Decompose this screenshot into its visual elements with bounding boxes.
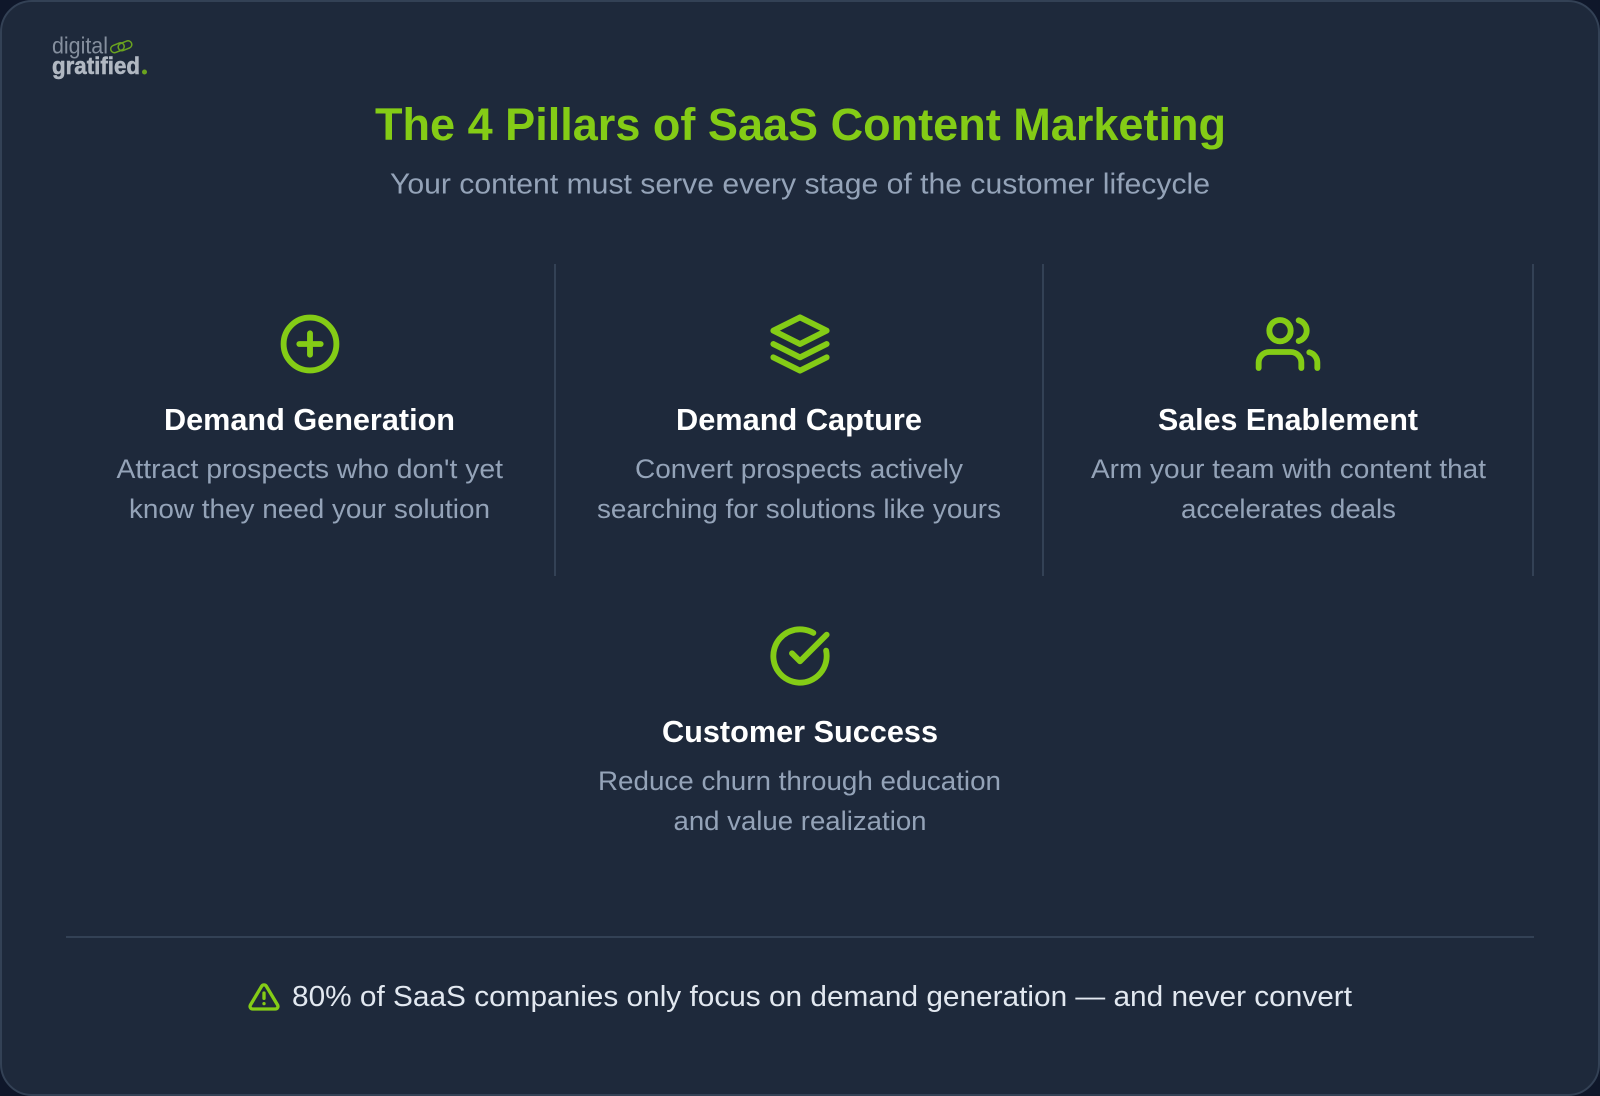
- callout: [250, 981, 1352, 1013]
- icon: users: [1259, 320, 1317, 368]
- callout text: 80% of SaaS companies only focus on demand generation — and never convert: [292, 981, 1352, 1013]
- logo: gratified: [52, 53, 140, 80]
- description: demand capture: searching for solutions like yours: [597, 494, 1001, 524]
- column divider 2: [1042, 264, 1044, 576]
- panel: demand generation: [116, 318, 504, 524]
- footer divider: [66, 936, 1534, 938]
- title: The 4 Pillars of SaaS Content Marketing: [375, 99, 1226, 150]
- subtitle: Your content must serve every stage of the customer lifecycle: [390, 168, 1210, 200]
- panel: demand capture: [597, 317, 1001, 524]
- icon: plus circle: [284, 318, 336, 370]
- heading: customer success: Customer Success: [662, 714, 938, 749]
- description: customer success: [598, 766, 1001, 836]
- description: sales enablement: Arm your team with content that: [1091, 454, 1487, 484]
- description: customer success: Reduce churn through education: [598, 766, 1001, 796]
- heading: demand generation: Demand Generation: [164, 402, 455, 437]
- panel: customer success: [598, 629, 1001, 836]
- panel: sales enablement: [1091, 320, 1487, 524]
- column divider 3: [1532, 264, 1534, 576]
- heading: sales enablement: Sales Enablement: [1158, 402, 1418, 437]
- description: demand capture: [597, 454, 1001, 524]
- description: sales enablement: [1091, 454, 1487, 524]
- icon: check circle: [773, 629, 827, 683]
- description: demand generation: know they need your solution: [129, 494, 490, 524]
- icon: warning triangle: [250, 985, 278, 1009]
- description: demand capture: Convert prospects actively: [635, 454, 964, 484]
- logo link icon: [110, 40, 133, 54]
- heading: demand capture: Demand Capture: [676, 402, 922, 437]
- column divider 1: [554, 264, 556, 576]
- logo: [52, 32, 147, 80]
- description: demand generation: [116, 454, 504, 524]
- description: customer success: and value realization: [674, 806, 926, 836]
- logo: digital: [52, 32, 108, 58]
- description: sales enablement: accelerates deals: [1181, 494, 1396, 524]
- icon: layers: [773, 317, 827, 371]
- description: demand generation: Attract prospects who don't yet: [116, 454, 504, 484]
